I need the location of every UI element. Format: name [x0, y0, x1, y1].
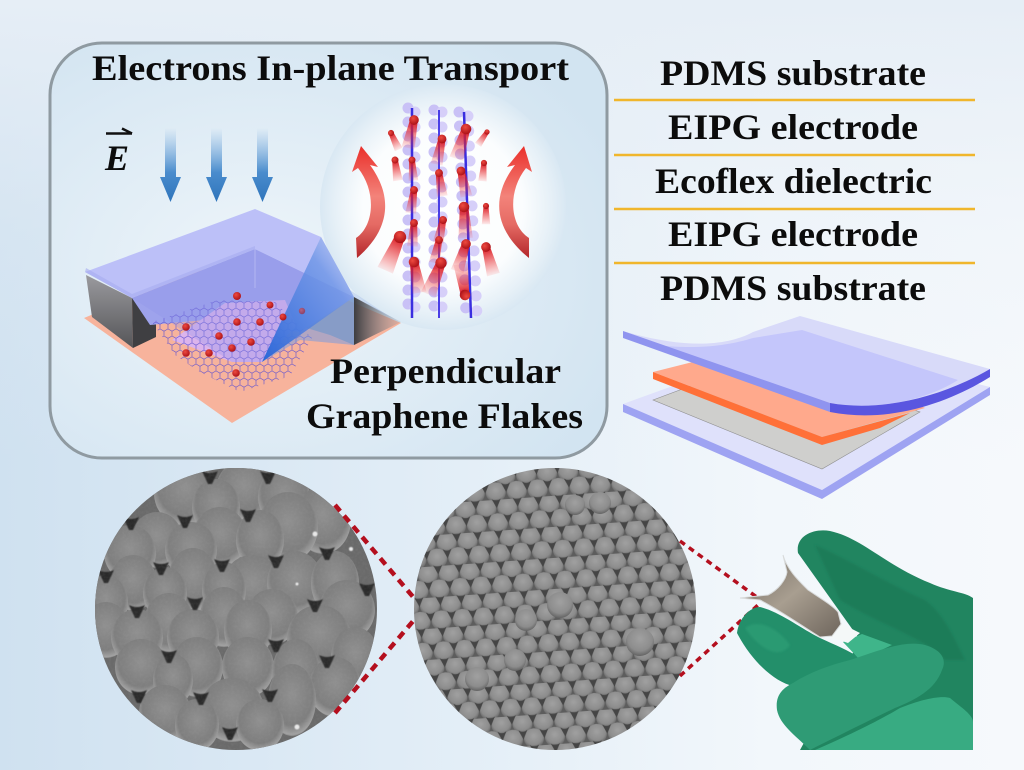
thumb highlight	[745, 624, 790, 652]
SEM image: overview microdome array	[410, 464, 700, 754]
thumb	[737, 607, 860, 686]
label: PDMS substrate: PDMS substrate	[660, 53, 926, 93]
orange Ecoflex layer	[653, 340, 925, 445]
magnified circle: graphene flakes with electrons	[320, 84, 566, 330]
graphene chains	[408, 108, 477, 318]
cavity back wall	[132, 249, 354, 332]
panel frame	[50, 43, 607, 458]
upper finger and palm	[798, 530, 973, 750]
grey dielectric walls	[86, 275, 401, 348]
flexible film	[740, 555, 841, 637]
larger raised domes	[465, 492, 654, 691]
caption: Perpendicular Graphene Flakes	[306, 351, 583, 436]
device: open capacitor with graphene flakes	[84, 209, 401, 423]
zoom connectors: red dotted lines	[335, 505, 758, 713]
knuckle	[815, 697, 973, 750]
white reflection	[830, 622, 860, 643]
surface grain	[101, 472, 372, 738]
layer stack legend	[614, 53, 975, 308]
electrons with tails	[378, 114, 500, 301]
dark pits	[98, 471, 375, 740]
dust specks	[294, 532, 353, 730]
caption: Perpendicular Graphene Flakes: Graphene Flakes	[306, 396, 583, 436]
transparent top plate	[85, 209, 354, 362]
graphene flake sheet	[152, 300, 312, 392]
light green gap	[843, 634, 892, 660]
photo: gloved hand holding flexible device	[737, 530, 973, 750]
salmon bottom electrode	[84, 270, 401, 423]
caption: Perpendicular Graphene Flakes: Perpendicular	[330, 351, 561, 391]
heading: Electrons In-plane Transport: Electrons In-plane Transport	[92, 48, 569, 88]
front finger	[777, 644, 944, 750]
curved top PDMS layer	[623, 316, 990, 415]
curved red arrows	[352, 146, 532, 258]
arrows: blue electric field arrows	[160, 128, 273, 202]
icon: electric field vector E	[104, 128, 132, 178]
lighting wash	[410, 464, 700, 754]
bottom PDMS layer	[623, 340, 990, 499]
magnifying cone	[262, 237, 398, 362]
lens background	[320, 84, 566, 330]
electrons on flakes	[182, 292, 305, 377]
finger shading	[815, 545, 965, 660]
SEM image: close-up microdomes	[95, 468, 377, 750]
label: PDMS substrate: PDMS substrate	[660, 268, 926, 308]
label: EIPG electrode: EIPG electrode	[668, 214, 918, 254]
panel: electrons in-plane transport	[50, 43, 607, 458]
diagram: exploded layer stack	[623, 316, 990, 499]
label: Ecoflex dielectric: Ecoflex dielectric	[655, 161, 932, 201]
icon: electric field vector E: E	[104, 138, 129, 178]
grey bottom electrode	[653, 360, 920, 469]
label: EIPG electrode: EIPG electrode	[668, 107, 918, 147]
dome texture	[82, 460, 379, 751]
